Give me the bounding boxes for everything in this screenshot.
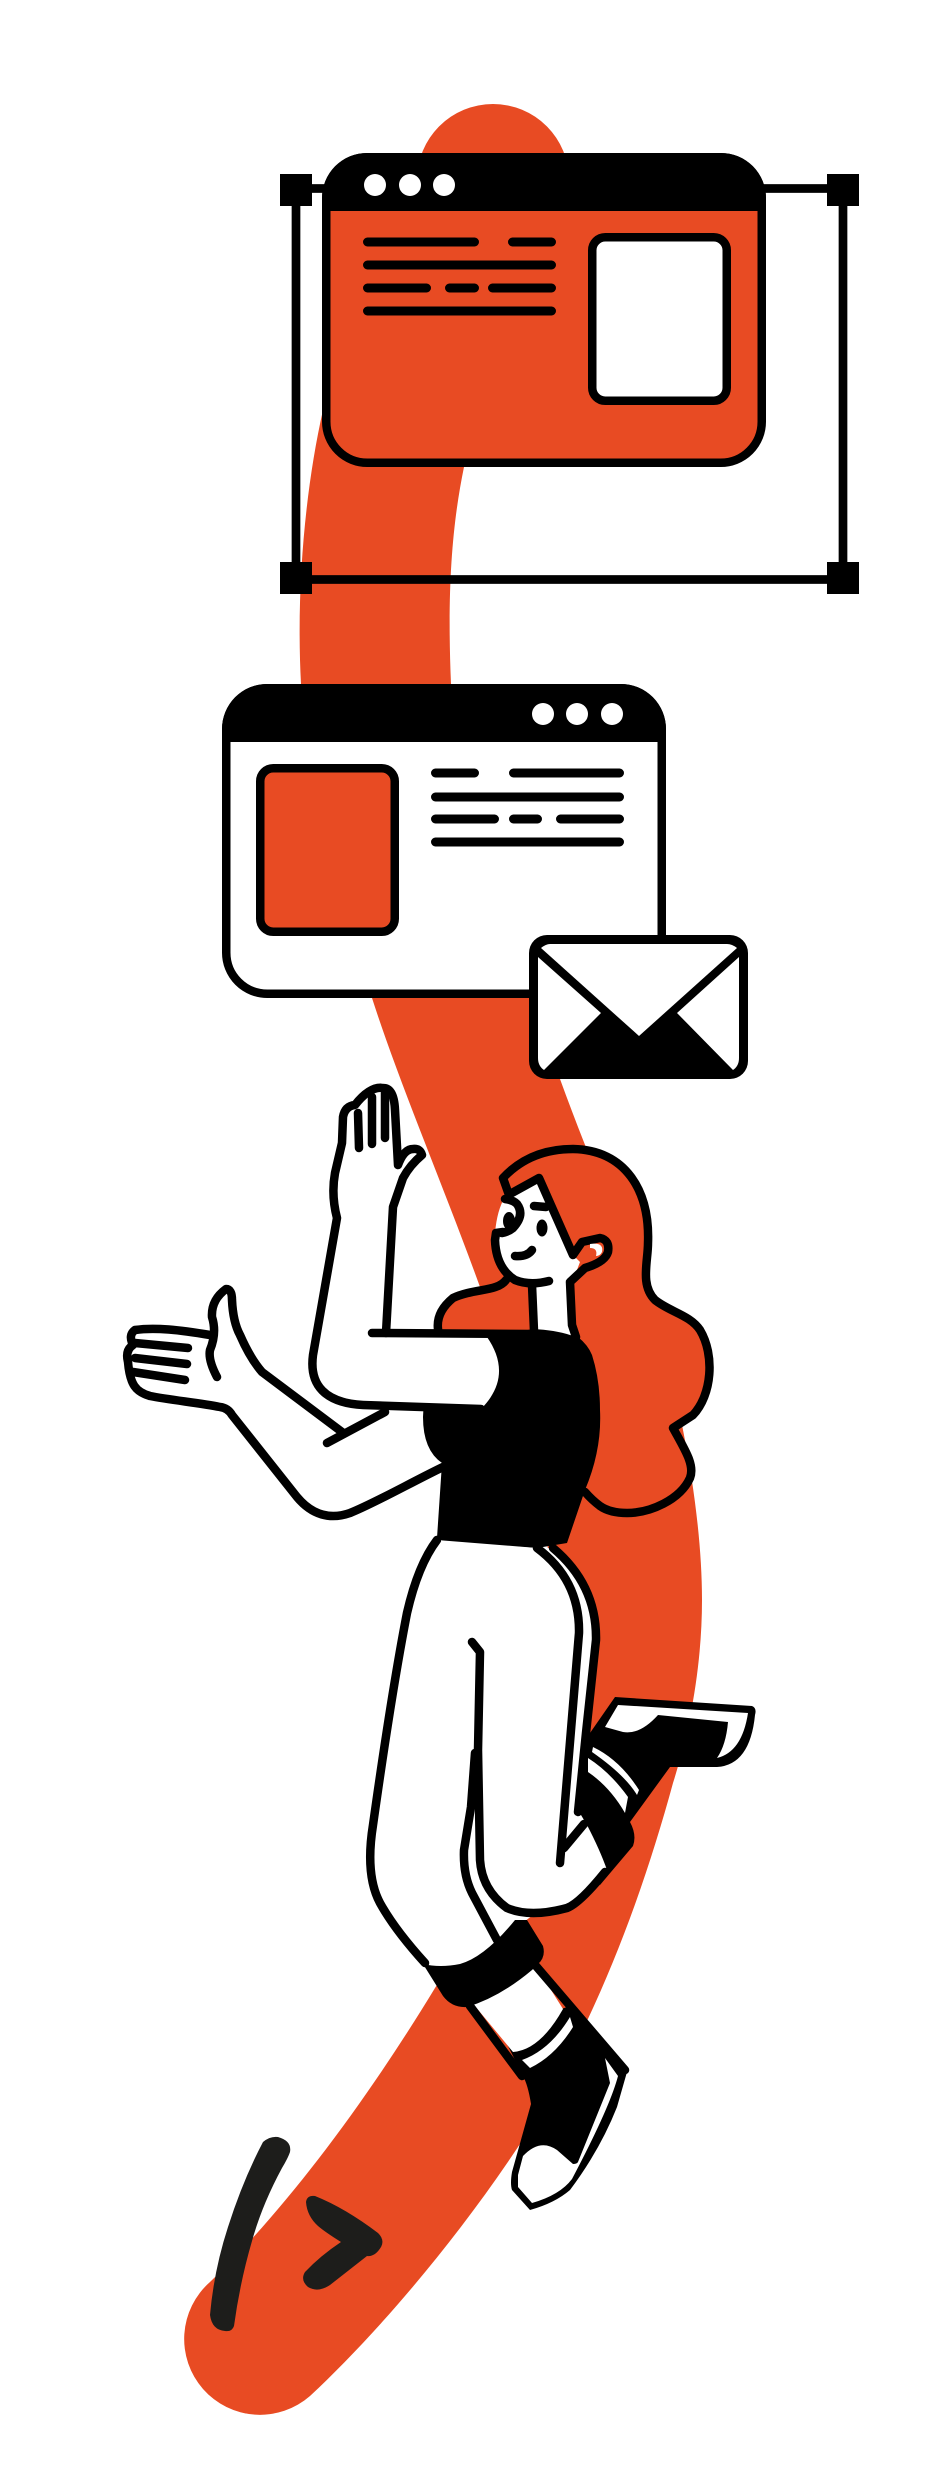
handle: top left <box>280 174 312 206</box>
handle: top right <box>827 174 859 206</box>
knee line <box>472 1642 605 1913</box>
selection frame <box>280 174 859 594</box>
hair fill <box>438 1149 710 1513</box>
orange ribbon path <box>184 104 702 2415</box>
sock band two <box>588 1758 628 1813</box>
leg outlines <box>470 1966 625 2076</box>
face details <box>495 1178 608 1337</box>
upper arm top line <box>372 1333 533 1334</box>
ear inner <box>590 1244 602 1256</box>
back leg line <box>464 1753 497 1940</box>
eyebrow <box>534 1206 546 1207</box>
image placeholder <box>260 768 395 932</box>
second thigh line <box>553 1548 596 1812</box>
right panel <box>677 957 739 1070</box>
window body <box>326 157 762 463</box>
shoulder hair outline <box>438 1280 506 1329</box>
left panel <box>538 957 601 1070</box>
title bar <box>222 684 666 742</box>
frame outline <box>296 188 843 580</box>
raised fingers <box>358 1092 385 1148</box>
decorative curved stroke <box>210 2137 290 2331</box>
window dots <box>532 703 623 725</box>
jaw <box>495 1232 549 1283</box>
title bar <box>322 153 766 211</box>
trousers fill <box>370 1540 607 1975</box>
lower foot <box>470 1966 627 2210</box>
outer leg outline <box>370 1540 437 1963</box>
profile eye <box>502 1199 520 1233</box>
near eye dot <box>503 1212 515 1230</box>
thumb and inner arm outline <box>210 1289 342 1432</box>
shoe <box>500 2005 627 2210</box>
raised arm outline <box>312 1088 481 1409</box>
shoe sole highlight <box>605 1705 748 1758</box>
envelope icon <box>529 935 748 1079</box>
text lines <box>368 242 552 311</box>
thigh line <box>537 1548 579 1863</box>
sock <box>470 1966 563 2052</box>
top flap <box>541 944 737 1036</box>
lower arm <box>127 1289 443 1516</box>
handle: bottom right <box>827 562 859 594</box>
neck line <box>532 1285 534 1331</box>
sock band one <box>592 1747 639 1795</box>
fingers <box>133 1343 188 1380</box>
far eye <box>536 1220 548 1236</box>
hand and arm outline <box>127 1329 443 1516</box>
raised arm fill <box>312 1088 499 1409</box>
knee wedge <box>564 1824 584 1848</box>
window dots <box>364 174 455 196</box>
text lines <box>436 773 620 842</box>
top browser window <box>322 153 766 463</box>
toe cap <box>518 2058 618 2203</box>
window body <box>226 688 662 994</box>
lower arm fill <box>127 1289 443 1516</box>
raised foot <box>570 1697 756 1885</box>
hair outline <box>503 1149 710 1513</box>
sock stripe <box>522 2017 573 2068</box>
black top <box>423 1329 600 1548</box>
image placeholder <box>592 237 727 401</box>
woman figure <box>127 1088 756 2210</box>
shoe and cuff <box>570 1697 756 1885</box>
hairline and ear <box>510 1178 608 1337</box>
trousers <box>370 1540 607 1975</box>
elbow crease <box>327 1412 385 1443</box>
lower browser window <box>222 684 666 994</box>
raised arm <box>312 1088 533 1409</box>
chevron arrow <box>303 2196 382 2290</box>
smile <box>515 1250 532 1256</box>
neck and face <box>495 1178 580 1340</box>
handle: bottom left <box>280 562 312 594</box>
envelope body <box>529 935 748 1079</box>
lower trouser cuff <box>423 1920 544 2007</box>
